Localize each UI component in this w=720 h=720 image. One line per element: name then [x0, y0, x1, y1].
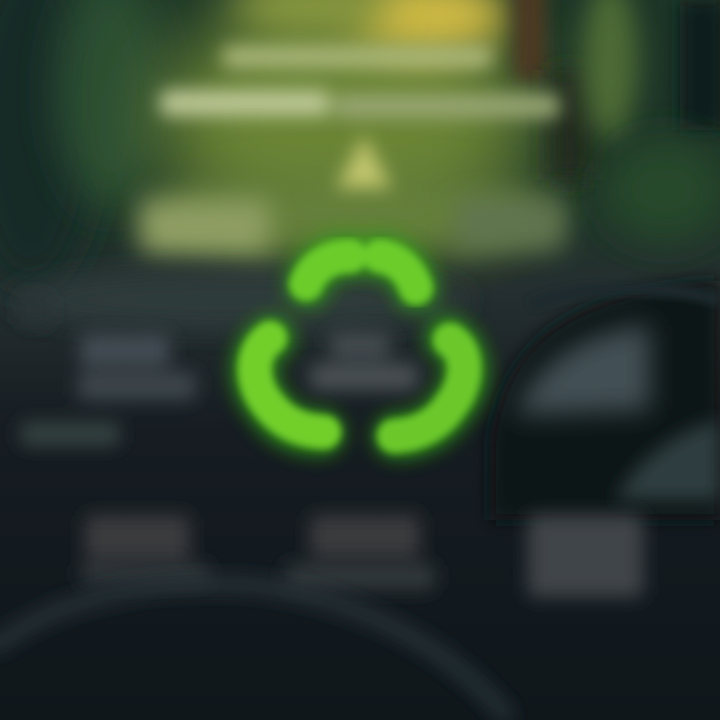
heading placeholder: blurred title lines — [160, 46, 560, 118]
recycling arrow: top — [306, 256, 416, 288]
panel: bottom blurred text blocks — [80, 515, 643, 597]
tire arc at bottom — [0, 584, 510, 720]
panel: right car shape — [490, 280, 720, 520]
centre blurred label — [310, 332, 418, 390]
icon: green recycling symbol — [254, 256, 466, 436]
recycling arrow glow — [254, 256, 466, 436]
dark road band — [10, 270, 470, 330]
forest backdrop — [0, 0, 720, 290]
icon: small triangle — [336, 135, 392, 188]
panel: left blurred text blocks — [20, 295, 196, 446]
recycling arrow: right — [394, 340, 464, 436]
blurred caption blocks in forest — [140, 198, 565, 254]
recycling arrow: left — [255, 338, 324, 432]
